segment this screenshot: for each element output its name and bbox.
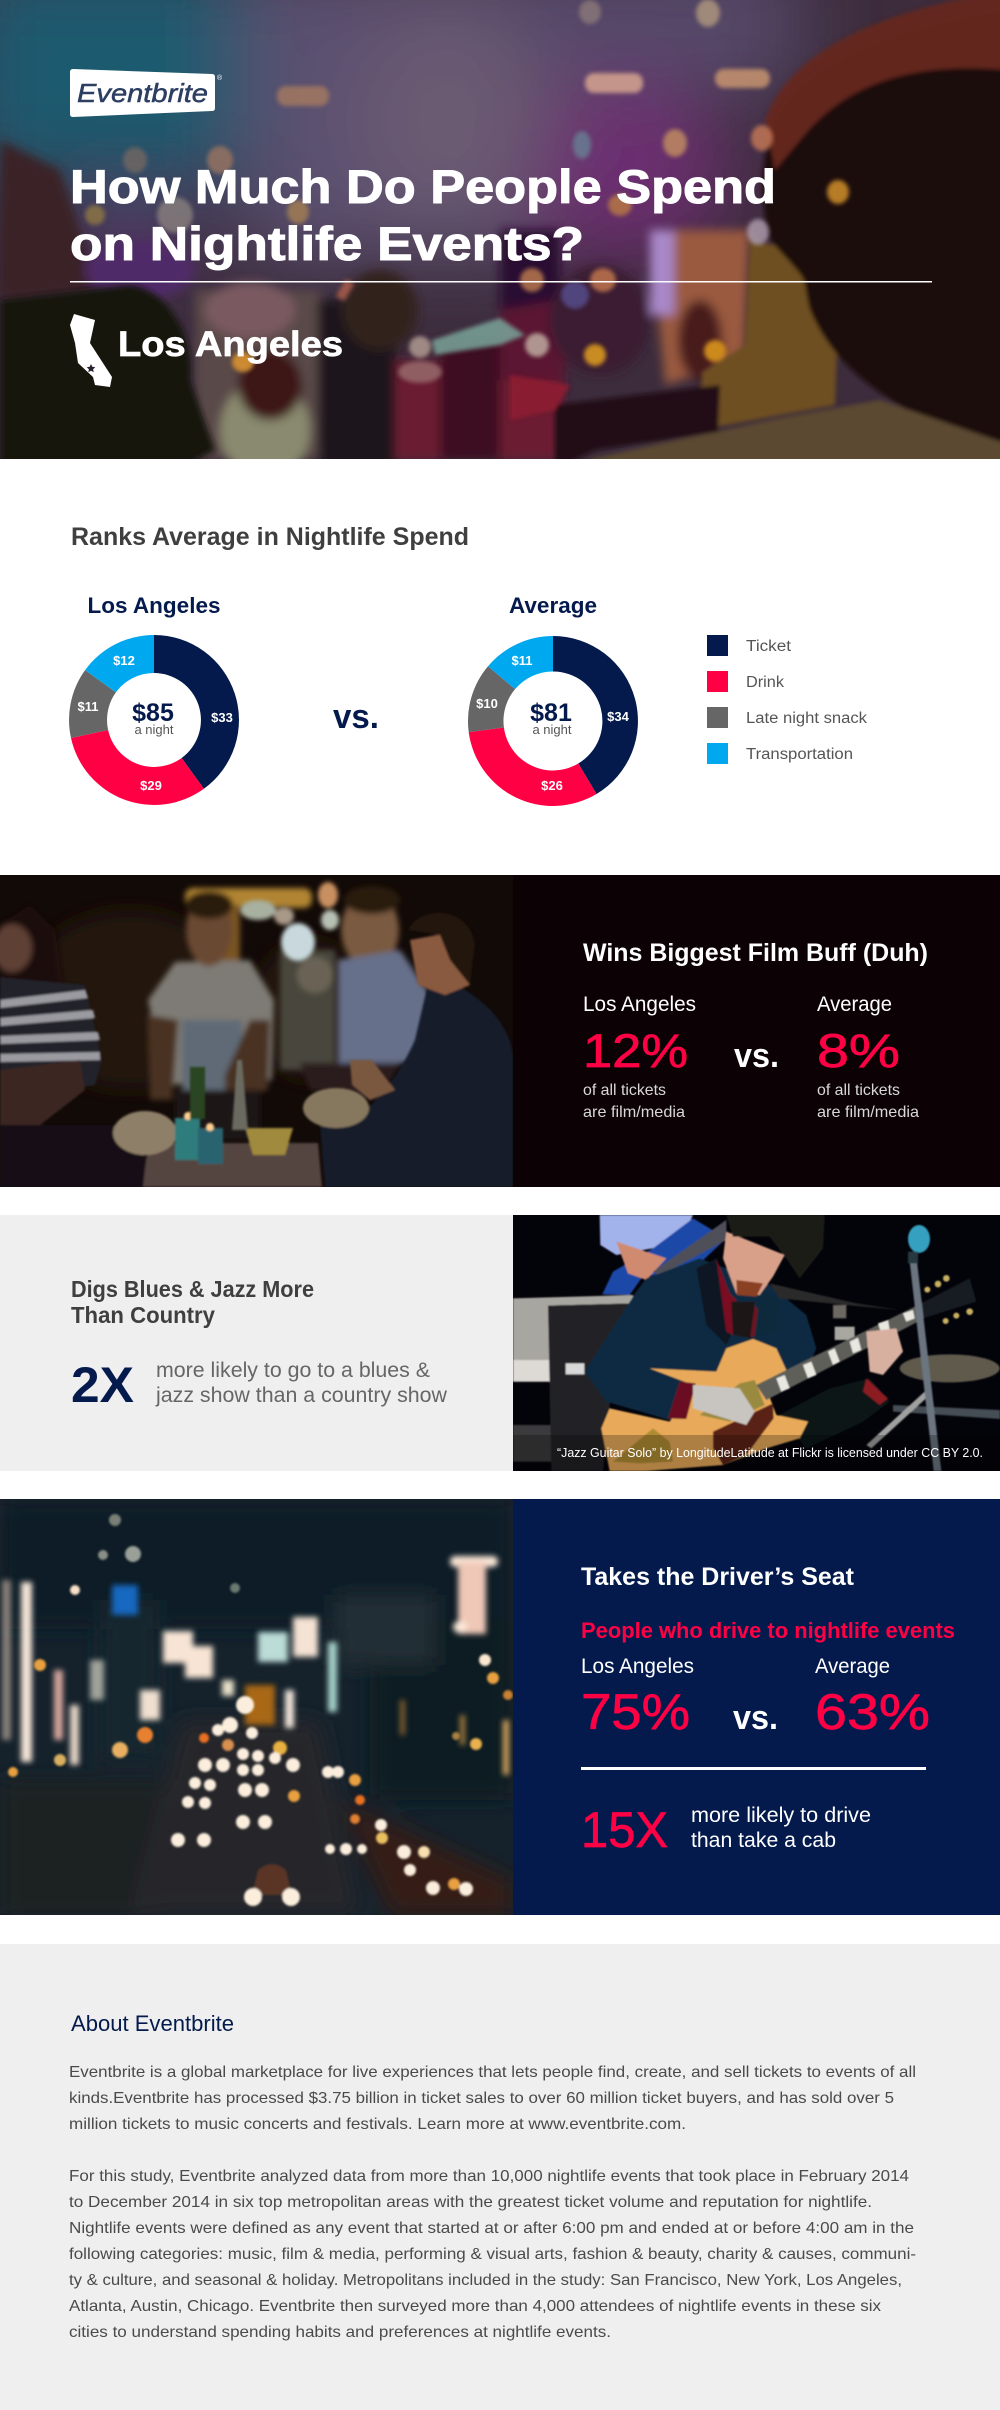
legend: Transportation <box>746 746 853 763</box>
driving text block: Los Angeles <box>581 1655 694 1678</box>
about paragraph one <box>69 2064 916 2133</box>
driving text block: than take a cab <box>691 1829 836 1852</box>
location heading: Los Angeles <box>118 325 343 364</box>
about paragraph two: For this study, Eventbrite analyzed data from more than 10,000 nightlife events that took place in February 2014 <box>69 2168 909 2185</box>
legend <box>707 635 867 764</box>
panel: film buff <box>0 875 1000 1187</box>
donut chart: Average: $26 <box>541 778 563 793</box>
hero photo: blurred concert crowd <box>0 0 1000 480</box>
donut chart: Los Angeles <box>69 593 239 805</box>
film text block <box>583 939 928 1121</box>
legend: Ticket <box>746 638 792 655</box>
donut chart: Los Angeles: Los Angeles <box>88 593 220 618</box>
donut chart: Average: $11 <box>512 653 532 668</box>
film text block: of all tickets <box>817 1082 900 1099</box>
donut chart: Los Angeles: a night <box>134 722 174 737</box>
about paragraph two: following categories: music, film & media, performing & visual arts, fashion & beauty, charity & causes, communi- <box>69 2246 916 2263</box>
about paragraph two: Nightlife events were defined as any event that started at or after 6:00 pm and ended at or before 4:00 am in the <box>69 2220 914 2237</box>
driving text block: more likely to drive <box>691 1804 871 1827</box>
panel: blues and jazz <box>0 1215 1000 1471</box>
film text block: Average <box>817 993 892 1016</box>
donut chart: Average <box>468 593 638 806</box>
donut chart: Los Angeles: $33 <box>211 710 233 725</box>
donut chart: Los Angeles: $29 <box>140 778 162 793</box>
donut chart: Average: Average <box>509 593 597 618</box>
donut chart: Average: $34 <box>607 709 630 724</box>
panel: average nightlife spend <box>69 523 867 806</box>
about paragraph two: to December 2014 in six top metropolitan areas with the greatest ticket volume and reputation for nightlife. <box>69 2194 872 2211</box>
donut chart: Average: $81 <box>530 699 572 727</box>
driving text block: Average <box>815 1655 890 1678</box>
about paragraph one: million tickets to music concerts and festivals. Learn more at www.eventbrite.com. <box>69 2116 686 2133</box>
about paragraph two: ty & culture, and seasonal & holiday. Metropolitans included in the study: San Francisco, New York, Los Angeles, <box>69 2272 902 2289</box>
photo: blurred traffic at night <box>0 1499 513 1920</box>
icon: California state with star <box>70 314 112 387</box>
logo: Eventbrite: Eventbrite <box>77 78 208 108</box>
driving text block: vs. <box>733 1699 778 1737</box>
film text block: 8% <box>817 1024 900 1077</box>
photo credit: “Jazz Guitar Solo” by LongitudeLatitude at Flickr is licensed under CC BY 2.0. <box>557 1445 983 1460</box>
film text block: are film/media <box>583 1104 685 1121</box>
donut chart: Los Angeles: $12 <box>113 653 135 668</box>
donut chart: Average: a night <box>532 722 572 737</box>
driving text block: Takes the Driver’s Seat <box>581 1563 855 1591</box>
film text block: 12% <box>583 1024 688 1077</box>
versus label: vs. <box>333 698 379 736</box>
jazz text block: Than Country <box>71 1302 215 1328</box>
donut chart: Los Angeles: $85 <box>132 699 174 727</box>
about paragraph two: Atlanta, Austin, Chicago. Eventbrite then surveyed more than 4,000 attendees of nightlife events in these six <box>69 2298 881 2315</box>
driving text block: 63% <box>815 1684 930 1740</box>
about paragraph two <box>69 2168 916 2341</box>
film text block: Los Angeles <box>583 993 696 1016</box>
about paragraph two: cities to understand spending habits and preferences at nightlife events. <box>69 2324 611 2341</box>
film text block: are film/media <box>817 1104 919 1121</box>
jazz text block <box>71 1276 447 1413</box>
photo: jazz guitarist <box>513 1215 1000 1471</box>
donut chart: Los Angeles: $11 <box>78 699 98 714</box>
about paragraph one: Eventbrite is a global marketplace for live experiences that lets people find, create, and sell tickets to events of all <box>69 2064 916 2081</box>
driving text block: People who drive to nightlife events <box>581 1618 955 1643</box>
logo: Eventbrite <box>70 69 223 117</box>
title <box>70 160 776 270</box>
legend: Drink <box>746 674 784 691</box>
jazz text block: more likely to go to a blues & <box>156 1358 430 1382</box>
film text block: vs. <box>734 1037 779 1075</box>
panel: about Eventbrite <box>0 1944 1000 2410</box>
driving text block: 75% <box>581 1684 690 1740</box>
jazz text block: Digs Blues & Jazz More <box>71 1276 314 1302</box>
about paragraph one: kinds.Eventbrite has processed $3.75 billion in ticket sales to over 60 million ticket buyers, and has sold over 5 <box>69 2090 894 2107</box>
legend: Late night snack <box>746 710 867 727</box>
title: How Much Do People Spend <box>70 160 776 213</box>
driving text block <box>581 1563 955 1858</box>
jazz text block: 2X <box>71 1357 134 1413</box>
driving text block: 15X <box>581 1802 668 1858</box>
jazz text block: jazz show than a country show <box>155 1383 447 1407</box>
panel: hero header <box>0 0 1000 480</box>
panel: driver's seat <box>0 1499 1000 1920</box>
title: on Nightlife Events? <box>70 217 584 270</box>
photo: outdoor movie night <box>0 875 513 1187</box>
logo: Eventbrite: ® <box>217 74 223 82</box>
about heading: About Eventbrite <box>71 2011 234 2036</box>
donut chart: Average: $10 <box>476 696 498 711</box>
film text block: of all tickets <box>583 1082 666 1099</box>
film text block: Wins Biggest Film Buff (Duh) <box>583 939 928 967</box>
heading: Ranks Average in Nightlife Spend <box>71 523 469 551</box>
